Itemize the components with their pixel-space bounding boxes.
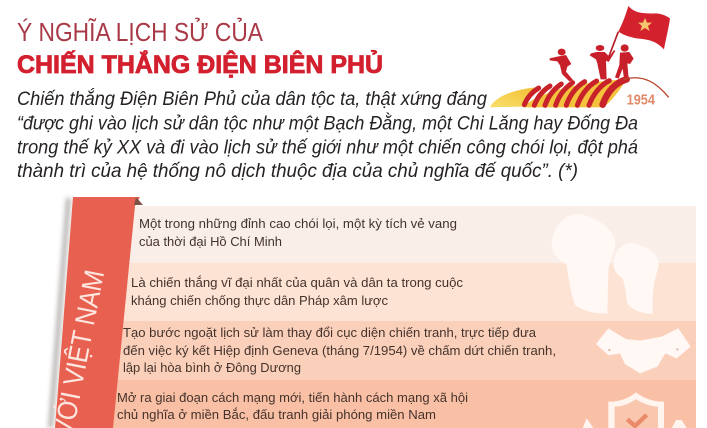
intro paragraph (17, 89, 638, 182)
row 3: đến việc ký kết Hiệp định Geneva (tháng 7/1954) về chấm dứt chiến tranh, (123, 343, 556, 358)
row 1 (100, 206, 696, 263)
intro paragraph: “được ghi vào lịch sử dân tộc như một Bạch Đằng, một Chi Lăng hay Đống Đa (17, 114, 638, 134)
icon: soldiers (550, 44, 634, 81)
row 3 (100, 321, 696, 380)
row 3: lập lại hòa bình ở Đông Dương (123, 360, 301, 375)
icon: shield with check (583, 392, 687, 428)
row 2: kháng chiến chống thực dân Pháp xâm lược (131, 293, 388, 308)
title line 2: CHIẾN THẮNG ĐIỆN BIÊN PHỦ (17, 49, 383, 79)
row 1: của thời đại Hồ Chí Minh (139, 234, 282, 249)
row 3: Tạo bước ngoặt lịch sử làm thay đổi cục diện chiến tranh, trực tiếp đưa (123, 325, 537, 340)
intro paragraph: trong thế kỷ XX và đi vào lịch sử thế giới như một chiến công chói lọi, đột phá (17, 138, 638, 158)
intro paragraph: thành trì của hệ thống nô dịch thuộc địa của chủ nghĩa đế quốc”. (*) (17, 161, 578, 182)
ribbon: with Vietnam (47, 197, 143, 428)
title (17, 16, 383, 79)
row 2: Là chiến thắng vĩ đại nhất của quân và dân ta trong cuộc (131, 275, 464, 290)
icon: hill: 1954 (627, 92, 655, 108)
icon: flag (607, 6, 670, 61)
icon: raised fists (552, 214, 659, 314)
row 2 (100, 263, 696, 321)
row 4: Mở ra giai đoạn cách mạng mới, tiến hành cách mạng xã hội (117, 390, 468, 405)
logo: flag, soldiers and hill 1954 (490, 6, 670, 108)
row 1: Một trong những đỉnh cao chói lọi, một kỳ tích vẻ vang (139, 216, 457, 231)
icon: hill (490, 78, 669, 108)
row 4 (100, 380, 696, 428)
panel: significance rows (100, 206, 696, 428)
row 4: chủ nghĩa ở miền Bắc, đấu tranh giải phóng miền Nam (117, 407, 436, 422)
icon: handshake (596, 328, 691, 373)
intro paragraph: Chiến thắng Điện Biên Phủ của dân tộc ta, thật xứng đáng (17, 89, 487, 110)
title line 1: Ý NGHĨA LỊCH SỬ CỦA (17, 16, 264, 47)
